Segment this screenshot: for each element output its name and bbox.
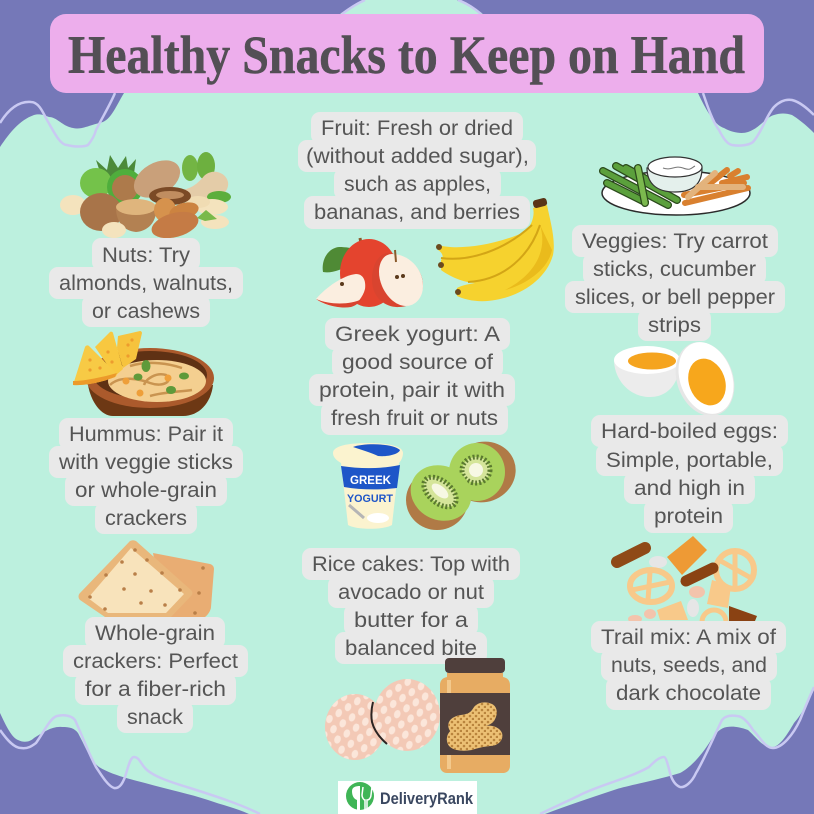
text: veggies: [565, 225, 785, 341]
text: whole-grain crackers: [63, 617, 248, 733]
text: nuts: almonds, walnuts,: [59, 272, 233, 295]
text: fruit: bananas, and berries: [314, 201, 520, 224]
icon: apples: [316, 238, 423, 308]
icon: vegetable platter: [602, 157, 750, 215]
text: trail mix: [591, 621, 786, 710]
text: nuts: [49, 238, 243, 327]
text: nuts: or cashews: [92, 300, 200, 323]
text: rice cakes: Rice cakes: Top with: [312, 553, 510, 576]
text: greek yogurt: [309, 318, 515, 435]
text: hummus: or whole-grain: [75, 479, 217, 502]
icon: greek yogurt cup: YOGURT: [347, 493, 393, 505]
text: trail mix: Trail mix: A mix of: [601, 626, 776, 649]
icon: hard-boiled eggs: [614, 334, 744, 424]
text: greek yogurt: fresh fruit or nuts: [331, 407, 498, 430]
text: whole-grain crackers: snack: [127, 706, 184, 729]
text: hummus: with veggie sticks: [58, 451, 233, 474]
text: veggies: strips: [648, 314, 701, 337]
text: trail mix: nuts, seeds, and: [611, 654, 767, 677]
icon: nuts: [60, 152, 231, 243]
text: hard-boiled eggs: Simple, portable,: [606, 449, 773, 472]
text: hard-boiled eggs: and high in: [634, 477, 745, 500]
text: fruit: Fruit: Fresh or dried: [321, 117, 513, 140]
text: veggies: slices, or bell pepper: [575, 286, 775, 309]
text: hard-boiled eggs: [591, 415, 788, 533]
text: rice cakes: balanced bite: [345, 637, 477, 660]
text: hummus: Hummus: Pair it: [69, 423, 223, 446]
text: hard-boiled eggs: Hard-boiled eggs:: [601, 420, 778, 443]
text: fruit: such as apples,: [344, 173, 491, 196]
icon: bananas: [436, 197, 554, 301]
icon: trail mix: [617, 536, 757, 634]
title banner: Healthy Snacks to Keep on Hand: [68, 25, 745, 85]
text: veggies: Veggies: Try carrot: [582, 230, 768, 253]
text: whole-grain crackers: Whole-grain: [95, 622, 215, 645]
text: nuts: Nuts: Try: [102, 244, 191, 267]
text: greek yogurt: good source of: [342, 351, 493, 374]
text: rice cakes: avocado or nut: [338, 581, 484, 604]
text: greek yogurt: Greek yogurt: A: [335, 323, 500, 346]
text: veggies: sticks, cucumber: [593, 258, 756, 281]
icon: greek yogurt cup: GREEK: [350, 473, 391, 487]
text: fruit: (without added sugar),: [306, 145, 529, 168]
text: greek yogurt: protein, pair it with: [319, 379, 505, 402]
icon: kiwi: [401, 433, 524, 531]
text: rice cakes: [302, 548, 520, 664]
text: trail mix: dark chocolate: [616, 682, 761, 705]
text: hummus: crackers: [105, 507, 187, 530]
text: fruit: [298, 112, 536, 229]
text: whole-grain crackers: crackers: Perfect: [73, 650, 238, 673]
icon: hummus: [73, 331, 214, 416]
icon: greek yogurt cup: [333, 443, 403, 529]
text: whole-grain crackers: for a fiber-rich: [85, 678, 226, 701]
logo: DeliveryRank: [338, 781, 477, 814]
text: rice cakes: butter for a: [354, 609, 468, 632]
icon: peanut butter jar: [440, 658, 510, 773]
text: hummus: [49, 418, 243, 534]
icon: whole-grain crackers: [78, 540, 214, 617]
logo: DeliveryRank: DeliveryRank: [380, 789, 473, 808]
text: hard-boiled eggs: protein: [654, 505, 723, 528]
icon: rice cakes: [325, 679, 440, 760]
